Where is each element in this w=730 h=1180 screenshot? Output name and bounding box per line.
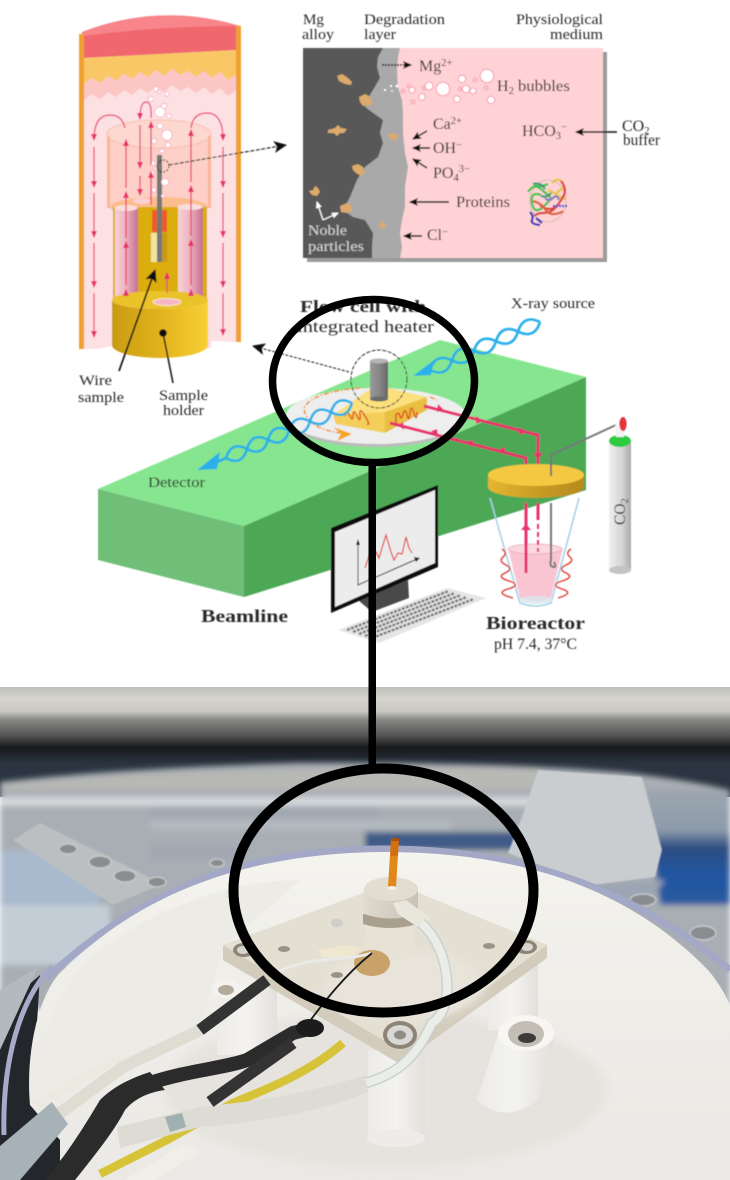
black cable upper xyxy=(150,1027,317,1083)
wire sample pointer xyxy=(119,270,155,371)
labels: species: 2 xyxy=(644,126,649,137)
grey tube end xyxy=(0,1102,68,1180)
translucent lid strip right xyxy=(508,770,662,885)
label: X-ray source: X-ray source xyxy=(511,296,595,312)
labels: species: Ca xyxy=(433,116,451,133)
labels: species: buffer xyxy=(623,132,661,149)
labels: species: − xyxy=(442,227,448,238)
dashed zoom circle xyxy=(351,350,407,408)
outer wall left xyxy=(79,34,84,349)
connector line between circles xyxy=(368,460,376,770)
tube fitting xyxy=(393,900,430,930)
heater coil right xyxy=(396,408,417,423)
red heating waves xyxy=(501,549,572,598)
label: noble particles: Noble xyxy=(308,223,347,239)
labels: species: − xyxy=(561,122,567,133)
black heat-shrink lower xyxy=(210,1043,293,1102)
labels: column headers xyxy=(302,12,603,43)
flow cell plate xyxy=(223,893,547,1050)
labels: species: 2+ xyxy=(451,116,462,127)
small bubbles on layer xyxy=(384,85,398,92)
black cable lower xyxy=(45,1072,165,1180)
ion arrows xyxy=(382,65,617,236)
protein structure xyxy=(528,180,567,225)
panel: beamline setup xyxy=(98,296,631,653)
flow cell cap xyxy=(364,877,418,918)
pale tube to lower left xyxy=(60,1030,200,1113)
photograph of flow cell xyxy=(0,687,730,1180)
labels: column headers: Mg xyxy=(303,12,324,28)
rear support leg right xyxy=(488,955,538,1030)
labels: species: 2 xyxy=(509,86,514,97)
H2 bubbles xyxy=(401,69,495,104)
keyboard xyxy=(338,588,486,643)
translucent lid strip left xyxy=(13,823,160,905)
label: flow cell heading: integrated heater xyxy=(297,317,434,336)
sample holder inner body xyxy=(113,207,207,299)
labels: species: H xyxy=(497,78,509,95)
flow cell gap ring xyxy=(363,914,417,928)
flow arrows xyxy=(94,102,223,337)
flow cell heater block xyxy=(333,385,427,433)
H2 bubbles in cell xyxy=(148,87,172,198)
physiological medium xyxy=(303,48,603,258)
cell body: pale medium xyxy=(84,50,236,349)
flow cell lower body xyxy=(365,925,413,960)
pink flow tubes xyxy=(390,406,538,471)
labels: species: 3− xyxy=(459,164,470,175)
white bracket lower xyxy=(125,1143,200,1180)
circle on diagram xyxy=(272,300,474,462)
panel shadow xyxy=(307,52,607,262)
dashed circle on wire xyxy=(157,160,169,172)
white disc xyxy=(29,852,730,1180)
bioreactor inner tubes xyxy=(521,503,555,573)
labels: species: 3 xyxy=(556,131,561,142)
labels: species xyxy=(419,58,661,244)
lid blurred background xyxy=(0,763,730,1010)
label: sample (wire): sample xyxy=(78,390,124,406)
sample holder base xyxy=(112,291,208,358)
labels: species: Proteins xyxy=(456,194,510,211)
heater coil left xyxy=(345,411,369,424)
bioreactor beaker xyxy=(490,498,579,606)
lid bolts xyxy=(59,844,716,940)
flow cell platform xyxy=(286,388,466,447)
flow channel right xyxy=(178,204,203,298)
black heat-shrink upper xyxy=(200,980,267,1030)
label: CO2: CO xyxy=(612,503,629,525)
X-ray beam: outgoing xyxy=(197,400,352,470)
circle on photo xyxy=(234,768,534,1012)
flow direction arrows xyxy=(398,404,543,459)
lid ring xyxy=(46,849,730,978)
label: noble particles: particles xyxy=(308,239,364,255)
label: CO2: 2 xyxy=(620,498,631,503)
orange medium band xyxy=(84,50,236,84)
labels: column headers: Physiological xyxy=(516,12,603,28)
labels: species: HCO xyxy=(522,123,556,140)
label: flow cell heading: Flow cell with xyxy=(300,297,427,316)
noble particles xyxy=(309,74,398,228)
pink wavy band xyxy=(84,69,236,100)
glue blob xyxy=(318,945,390,976)
plate holes xyxy=(278,918,495,978)
black cable knot xyxy=(296,1019,324,1037)
free standing post xyxy=(477,1015,554,1112)
CO2 feed line into lid xyxy=(551,425,616,476)
CO2 cylinder xyxy=(609,417,631,574)
orange capillary xyxy=(387,838,399,890)
yellow wire xyxy=(100,1043,343,1174)
label: bioreactor: Bioreactor xyxy=(486,613,585,633)
front support leg xyxy=(367,1050,425,1147)
wire sample cylinder xyxy=(370,358,388,402)
labels: species: CO xyxy=(622,118,644,135)
cell top: red cap xyxy=(82,15,240,58)
label: wire sample: Wire xyxy=(79,373,112,389)
cell top: red cap highlight xyxy=(82,15,240,36)
label: noble particles xyxy=(308,223,364,255)
sample holder pointer xyxy=(159,329,173,383)
wire sample xyxy=(157,155,162,262)
beamline: green block xyxy=(98,340,586,597)
panel: magnified flow cell cross-section xyxy=(78,15,286,419)
heater and wire mount xyxy=(151,210,167,262)
label: beamline: Beamline xyxy=(201,606,288,626)
white arrows to noble particles xyxy=(317,202,338,220)
flow channel left xyxy=(114,205,138,298)
orange rotation arrow xyxy=(304,388,437,441)
outer wall right xyxy=(236,26,241,342)
labels: column headers: alloy xyxy=(302,27,335,43)
aluminium ring edge xyxy=(0,967,38,1050)
labels: species: OH xyxy=(433,140,456,157)
transparent tube upper xyxy=(365,923,447,1083)
dark gap at left xyxy=(0,975,70,1180)
white wire xyxy=(270,953,372,977)
label: sample holder: Sample xyxy=(159,388,208,404)
label: flow cell heading xyxy=(297,297,434,336)
labels: species: 2+ xyxy=(441,58,452,69)
thin black wire xyxy=(298,953,372,1037)
photo background top xyxy=(0,687,730,797)
labels: column headers: Degradation xyxy=(364,12,446,28)
inner cylinder xyxy=(107,120,211,217)
dashed arrow to degradation detail xyxy=(169,145,286,165)
labels: species: − xyxy=(456,140,462,151)
label: holder: holder xyxy=(163,403,204,419)
plate underside edge xyxy=(223,945,547,1064)
label: bioreactor conditions: pH 7.4, 37°C xyxy=(494,636,577,653)
labels: species: Mg xyxy=(419,58,441,75)
rear support leg left xyxy=(211,980,277,1055)
disc base xyxy=(163,1012,607,1168)
monitor xyxy=(331,485,438,613)
plate screws xyxy=(233,940,537,1049)
disc bowl xyxy=(38,880,300,1100)
bioreactor lid xyxy=(488,464,584,498)
white bracket lower left xyxy=(32,1053,123,1108)
Mg alloy xyxy=(303,48,383,258)
labels: species: PO xyxy=(433,165,453,182)
panel: degradation layer detail xyxy=(302,12,661,262)
lavender ring left xyxy=(4,966,52,1135)
labels: column headers: layer xyxy=(364,27,396,43)
labels: species: 4 xyxy=(453,173,459,184)
transparent tube lower xyxy=(117,1075,368,1148)
dashed arrow to cross-section xyxy=(253,346,349,372)
label: detector: Detector xyxy=(148,475,205,491)
labels: column headers: medium xyxy=(550,27,603,43)
X-ray beam: incoming xyxy=(413,320,540,376)
labels: species: bubbles xyxy=(514,78,570,95)
labels: species: Cl xyxy=(427,227,442,244)
plate shading xyxy=(325,950,485,1020)
degradation layer xyxy=(340,48,408,258)
